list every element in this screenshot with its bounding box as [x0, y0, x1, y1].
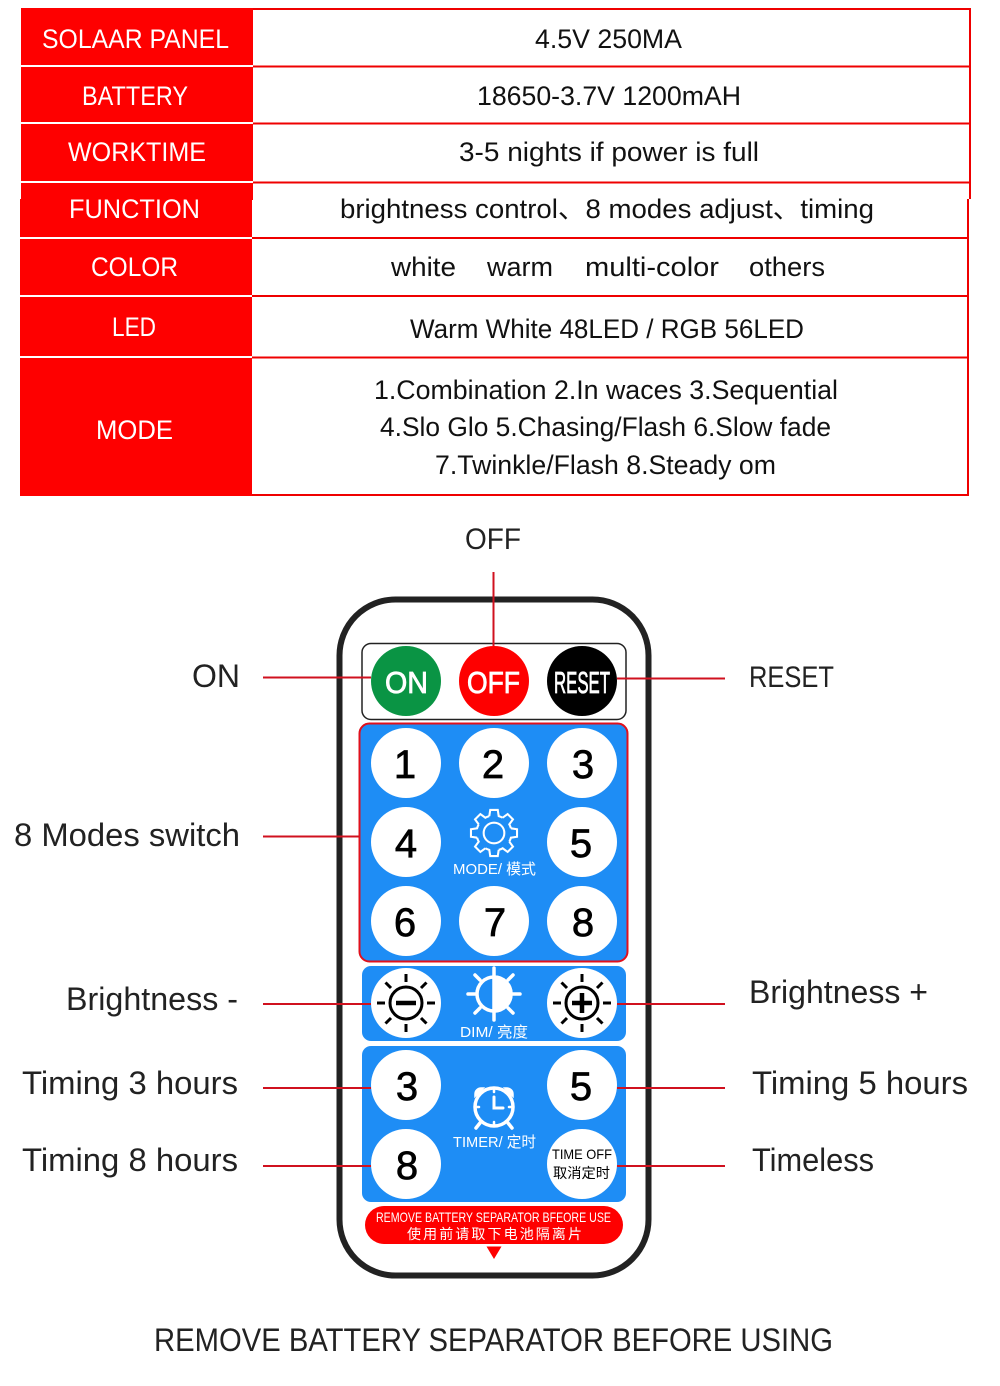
row: worktime: 3-5 nights if power is full: [459, 137, 759, 167]
row: function: FUNCTION: [69, 194, 200, 224]
table grid lines: [252, 9, 970, 495]
row: color: COLOR: [91, 252, 178, 282]
row: color: warm: [486, 252, 553, 282]
panel: power buttons: [362, 644, 626, 720]
panel: dimmer: DIM/ 亮度: [460, 1024, 528, 1041]
row: mode: MODE: [96, 415, 173, 445]
panel: timer: 8: [396, 1144, 418, 1188]
row: mode: [96, 375, 838, 480]
icon: brightness plus: [553, 974, 611, 1032]
spec table: [20, 8, 970, 496]
row: battery: BATTERY: [82, 81, 188, 111]
battery separator notice: 使用前请取下电池隔离片: [407, 1226, 582, 1242]
arrow: pull tab: [486, 1246, 502, 1259]
callout: brightness minus: Brightness -: [66, 981, 238, 1017]
panel: mode buttons: 2: [482, 743, 504, 787]
panel: timer: 3: [396, 1065, 418, 1109]
icon: alarm clock: [475, 1088, 513, 1128]
row: mode: 4.Slo Glo 5.Chasing/Flash 6.Slow fade: [380, 412, 831, 442]
callout: off: OFF: [465, 523, 521, 556]
table header column: [20, 8, 253, 496]
panel: mode buttons: 5: [570, 822, 592, 866]
icon: gear: [471, 810, 517, 856]
callout: reset: RESET: [749, 661, 834, 694]
row: worktime: [68, 137, 759, 167]
callout: timing 5 hours: Timing 5 hours: [752, 1065, 968, 1101]
icon: brightness minus: [377, 974, 435, 1032]
panel: power buttons: OFF: [467, 665, 520, 700]
panel: timer: [362, 1046, 626, 1202]
row: function: brightness control、8 modes adjust、timing: [340, 194, 874, 224]
panel: timer: TIMER/ 定时: [453, 1134, 536, 1151]
icon: half sun: [468, 968, 520, 1020]
panel: mode buttons: 1: [394, 743, 416, 787]
row: color: white: [390, 252, 456, 282]
panel: mode buttons: 4: [395, 822, 417, 866]
remote control: [340, 600, 648, 1276]
callout: timeless: Timeless: [752, 1142, 874, 1178]
row: led: LED: [112, 312, 156, 342]
row: battery: [82, 81, 741, 111]
row: function: [69, 194, 874, 224]
row: color: multi-color: [585, 252, 719, 282]
row: mode: 1.Combination 2.In waces 3.Sequential: [374, 375, 838, 405]
panel: mode buttons: [360, 724, 628, 962]
row: mode: 7.Twinkle/Flash 8.Steady om: [435, 450, 776, 480]
panel: dimmer: [362, 966, 626, 1041]
row: led: Warm White 48LED / RGB 56LED: [410, 314, 804, 344]
panel: mode buttons: MODE/ 模式: [453, 861, 536, 878]
panel: mode buttons: 7: [484, 901, 506, 945]
panel: mode buttons: 6: [394, 901, 416, 945]
callout: timing 3 hours: Timing 3 hours: [22, 1065, 238, 1101]
footer note: REMOVE BATTERY SEPARATOR BEFORE USING: [154, 1322, 833, 1358]
panel: mode buttons: 8: [572, 901, 594, 945]
callout: timing 8 hours: Timing 8 hours: [22, 1142, 238, 1178]
callout: on: ON: [192, 658, 240, 694]
battery separator notice: REMOVE BATTERY SEPARATOR BFEORE USE: [376, 1209, 611, 1225]
panel: power buttons: RESET: [554, 665, 610, 700]
callout: off: [465, 523, 521, 646]
panel: power buttons: ON: [385, 665, 428, 700]
panel: timer: 5: [570, 1065, 592, 1109]
row: solar panel: 4.5V 250MA: [535, 24, 682, 54]
row: solar panel: [42, 24, 682, 54]
callout: 8 modes switch: 8 Modes switch: [14, 817, 240, 853]
panel: timer: 取消定时: [553, 1165, 610, 1181]
panel: mode buttons: 3: [572, 743, 594, 787]
row: color: others: [749, 252, 825, 282]
battery separator notice: [365, 1206, 623, 1244]
remote body: [340, 600, 648, 1276]
row: worktime: WORKTIME: [68, 137, 206, 167]
callout: brightness plus: Brightness +: [749, 974, 928, 1010]
row: solar panel: SOLAAR PANEL: [42, 24, 229, 54]
row: color: [91, 252, 825, 282]
row: battery: 18650-3.7V 1200mAH: [477, 81, 741, 111]
panel: timer: TIME OFF: [552, 1146, 612, 1162]
row: led: [112, 312, 804, 344]
